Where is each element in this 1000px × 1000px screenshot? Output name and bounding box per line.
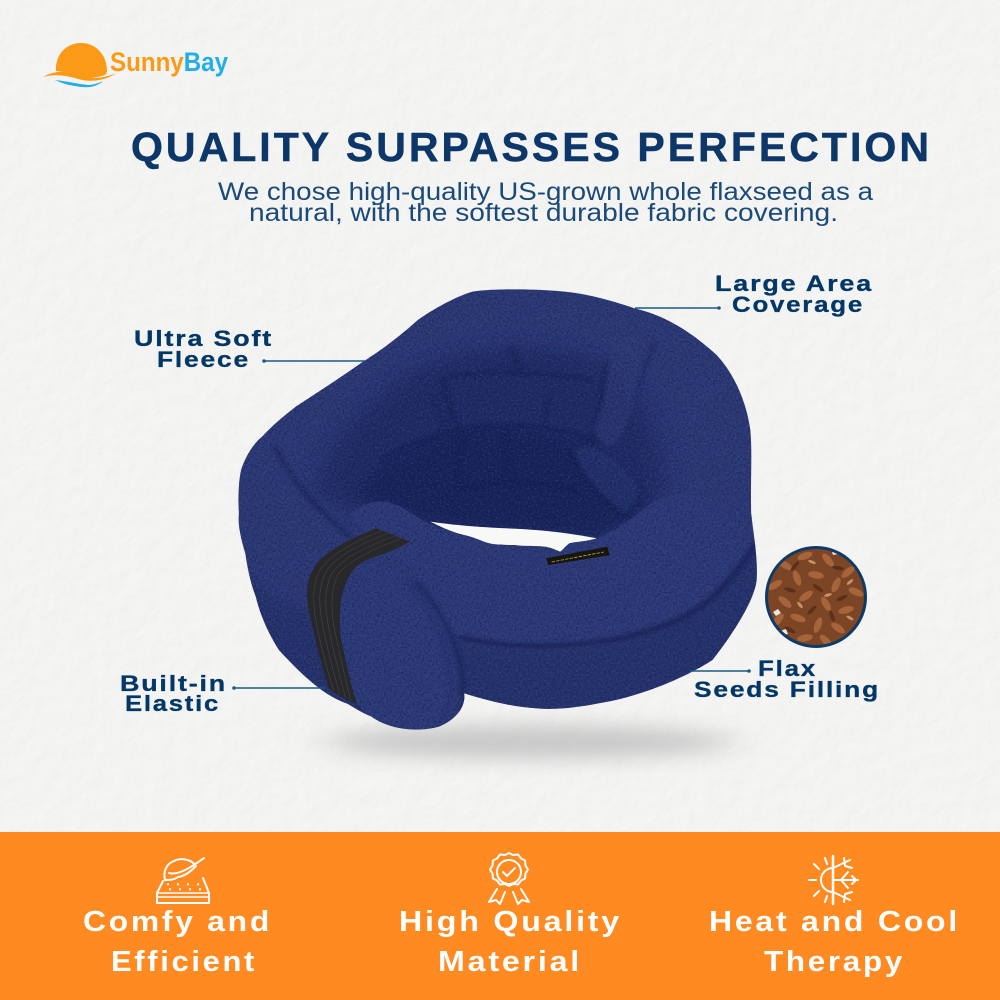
title: QUALITY SURPASSES PERFECTION [131,124,932,170]
icon: half sun half snowflake [809,856,858,904]
seed texture [768,549,864,645]
callout: Flax Seeds Filling: Seeds Filling [694,677,880,702]
side pad lighter panels [595,368,642,444]
benefit: High Quality Material [399,853,622,978]
icon: leaf on mattress [157,858,209,903]
subtitle [218,178,873,227]
benefit: High Quality Material: Material [438,946,582,978]
disc inner crease [410,583,446,656]
logo wordmark: SunnyBay [110,47,228,77]
icon: award rosette [489,853,529,904]
benefit: Comfy and Efficient [83,858,272,978]
callout: Ultra Soft Fleece [134,326,365,372]
subtitle: We chose high-quality US-grown whole flaxseed as a [218,178,873,206]
elastic band [307,528,410,704]
callout: Flax Seeds Filling [690,656,880,702]
callout: Large Area Coverage [635,271,873,317]
circle border [766,548,866,646]
inner wall shading [317,347,666,533]
flax seeds circle [765,546,867,649]
callout: Built-in Elastic: Elastic [125,691,220,716]
callout: Built-in Elastic: Built-in [120,671,227,696]
pillow silhouette [238,289,757,730]
benefit: Heat and Cool Therapy: Heat and Cool [709,906,960,938]
floor shadow under pillow [325,725,735,759]
fabric label tag [546,547,610,565]
neck pillow product [238,289,763,730]
benefit: Comfy and Efficient: Comfy and [83,906,272,938]
wall seams [275,343,654,537]
callout: Flax Seeds Filling: Flax [758,656,817,681]
callout: Large Area Coverage: Large Area [715,271,873,296]
benefit: Comfy and Efficient: Efficient [111,946,257,978]
inner cavity [359,429,645,538]
callout: Built-in Elastic [120,671,325,716]
benefit: Heat and Cool Therapy: Therapy [764,946,905,978]
subtitle: natural, with the softest durable fabric covering. [249,199,838,227]
benefit: Heat and Cool Therapy [709,856,960,978]
orange benefits band [0,832,1000,1000]
hole showing background [430,522,597,552]
front upper tube [350,493,755,645]
logo: SunnyBay [43,43,228,87]
disc edge crease [416,582,462,695]
earpad disc [333,563,462,729]
icon: sun over waves [43,43,117,87]
benefit: High Quality Material: High Quality [399,906,622,938]
callout: Ultra Soft Fleece: Fleece [157,347,250,372]
callout: Ultra Soft Fleece: Ultra Soft [134,326,273,351]
tube crease shadow [460,543,755,646]
lower tube shadow [245,540,763,713]
callout: Large Area Coverage: Coverage [732,292,864,317]
